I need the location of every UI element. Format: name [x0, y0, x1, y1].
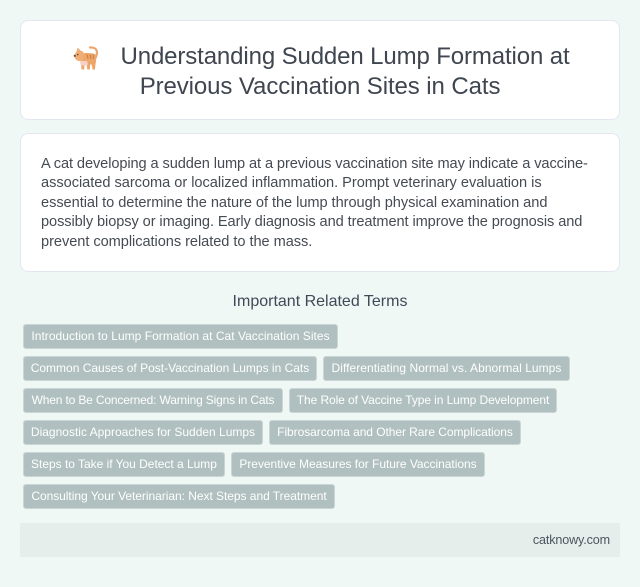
- tag: [23, 420, 263, 445]
- tag: Differentiating Normal vs. Abnormal Lumps: [332, 361, 561, 375]
- heading: important related terms: Important Related Terms: [233, 293, 407, 310]
- footer: [20, 523, 620, 557]
- tag: Steps to Take if You Detect a Lump: [31, 457, 217, 471]
- summary text: prevent complications related to the mass.: [41, 234, 312, 250]
- tag list: [23, 324, 570, 509]
- tag: Fibrosarcoma and Other Rare Complications: [277, 425, 513, 439]
- tag: [323, 356, 570, 381]
- tag: Diagnostic Approaches for Sudden Lumps: [31, 425, 255, 439]
- tag: [269, 420, 521, 445]
- icon: cat: [74, 46, 98, 70]
- summary text: possibly biopsy or imaging. Early diagnosis and treatment improve the prognosis and: [41, 214, 582, 230]
- tag: When to Be Concerned: Warning Signs in Cats: [32, 393, 274, 407]
- tag: [23, 484, 335, 509]
- tag: [231, 452, 485, 477]
- tag: Preventive Measures for Future Vaccinations: [239, 457, 477, 471]
- title panel: [20, 20, 620, 120]
- footer source: catknowy.com: [533, 533, 610, 547]
- summary panel: [20, 133, 620, 272]
- tag: [23, 356, 317, 381]
- tag: Introduction to Lump Formation at Cat Vaccination Sites: [31, 329, 330, 343]
- summary text: associated sarcoma or localized inflammation. Prompt veterinary evaluation is: [41, 175, 542, 191]
- title: Previous Vaccination Sites in Cats: [140, 73, 500, 100]
- tag: [23, 324, 338, 349]
- tag: The Role of Vaccine Type in Lump Development: [297, 393, 549, 407]
- title: Understanding Sudden Lump Formation at: [120, 43, 570, 70]
- summary text: essential to determine the nature of the lump through physical examination and: [41, 195, 547, 211]
- tag: Consulting Your Veterinarian: Next Steps and Treatment: [31, 489, 327, 503]
- summary text: [41, 156, 588, 250]
- title: [120, 43, 570, 100]
- tag: [23, 388, 283, 413]
- tag: Common Causes of Post-Vaccination Lumps in Cats: [31, 361, 309, 375]
- tag: [289, 388, 557, 413]
- tag: [23, 452, 225, 477]
- summary text: A cat developing a sudden lump at a previous vaccination site may indicate a vaccine-: [41, 156, 588, 172]
